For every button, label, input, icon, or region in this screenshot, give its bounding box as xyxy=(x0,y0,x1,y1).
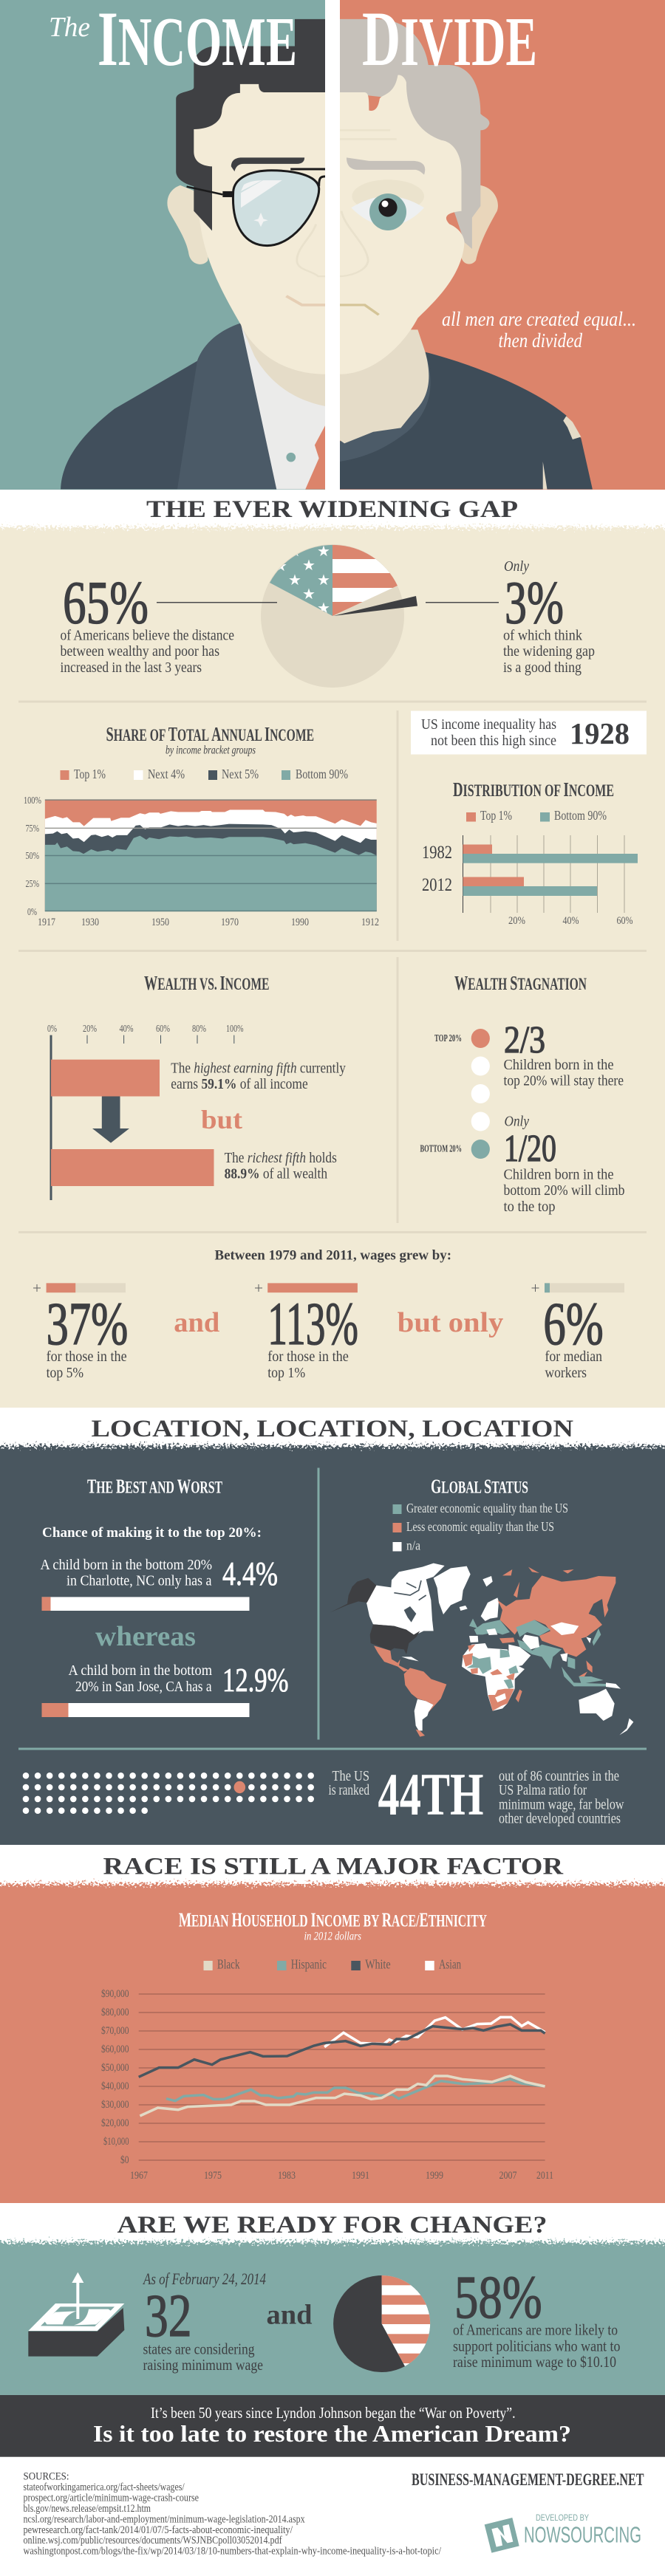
bar chart: 40% xyxy=(563,915,579,927)
pie: American flag pie chart: ★ xyxy=(288,572,301,589)
tagline: then divided xyxy=(498,329,582,352)
chart x axis labels: 1970 xyxy=(221,917,239,928)
poor man neck xyxy=(340,329,429,443)
chart subheading: in 2012 dollars xyxy=(304,1931,361,1943)
tagline xyxy=(442,308,636,352)
stat: 2/3: Children born in the xyxy=(504,1057,614,1073)
percent axis: 100% xyxy=(226,1024,244,1035)
chart y axis labels: 0% xyxy=(27,907,37,918)
stat: 3 percent xyxy=(426,558,595,676)
legend: Next 4% xyxy=(148,767,185,781)
hero illustration: the income divide xyxy=(0,0,665,490)
pie: 58 percent xyxy=(333,2275,433,2374)
chart y axis labels: 50% xyxy=(25,851,39,862)
poor man eyebrow xyxy=(347,157,425,175)
stat: 58 percent: of Americans are more likely to xyxy=(453,2321,618,2339)
banner: american dream: It’s been 50 years since Lyndon Johnson began the “War on Poverty”. xyxy=(151,2404,516,2422)
section: cream background xyxy=(0,527,665,1408)
legend: Black xyxy=(217,1957,239,1972)
stat: 1/20 xyxy=(504,1114,625,1215)
heading: Between 1979 and 2011, wages grew by: xyxy=(214,1248,451,1263)
poor man collar xyxy=(340,352,431,462)
callout: inequality since 1928: 1928 xyxy=(570,716,630,750)
poor man eyelid xyxy=(352,179,424,213)
rich man eyebrow xyxy=(231,157,304,171)
section: teal background xyxy=(0,2242,665,2395)
percent axis: 40% xyxy=(120,1024,134,1035)
legend: White xyxy=(365,1957,391,1972)
chart x axis labels: 1917 xyxy=(38,917,55,928)
ladder of dots: BOTTOM 20% xyxy=(420,1143,462,1155)
stat: 113 percent: top 1% xyxy=(267,1365,305,1381)
legend xyxy=(204,1957,461,1972)
map legend xyxy=(393,1501,568,1552)
bar chart: 1982 xyxy=(422,843,452,863)
text: but only: but only xyxy=(398,1307,503,1338)
charlotte text: in Charlotte, NC only has a xyxy=(66,1573,212,1589)
developed by: DEVELOPED BY xyxy=(536,2512,589,2523)
sources: washingtonpost.com/blogs/the-fix/wp/2014/03/18/10-numbers-that-explain-why-income-inequality-is-a-hot-topic/ xyxy=(24,2546,442,2558)
sources: bls.gov/news.release/empsit.t12.htm xyxy=(24,2503,151,2515)
y axis labels: $30,000 xyxy=(101,2099,129,2111)
stat: 1/20: 1/20 xyxy=(504,1128,556,1170)
charlotte text: A child born in the bottom 20% xyxy=(40,1557,212,1573)
text: richest fifth: 88.9% of all wealth xyxy=(225,1166,327,1182)
y axis labels: $20,000 xyxy=(101,2117,129,2129)
y axis labels: $90,000 xyxy=(101,1988,129,2000)
pie: American flag pie chart: ★ xyxy=(317,572,330,589)
sources: SOURCES: xyxy=(24,2471,69,2483)
stat: 58 percent: raise minimum wage to $10.10 xyxy=(453,2353,616,2371)
x axis labels: 1999 xyxy=(426,2170,443,2182)
stat: 2/3: top 20% will stay there xyxy=(504,1073,624,1089)
poor man forehead wrinkles xyxy=(340,130,397,139)
ranking text: minimum wage, far below xyxy=(499,1796,624,1812)
date: As of February 24, 2014 xyxy=(142,2270,266,2288)
panel: wealth vs. income xyxy=(47,972,346,1200)
bar chart: 2012 xyxy=(422,875,452,895)
panel heading: THE BEST AND WORST xyxy=(87,1476,222,1498)
legend: Next 5% xyxy=(222,767,259,781)
y axis labels: $10,000 xyxy=(103,2136,129,2148)
y axis labels: $60,000 xyxy=(101,2044,129,2055)
y axis labels: $40,000 xyxy=(101,2080,129,2092)
callout: inequality since 1928: not been this high since xyxy=(431,733,556,749)
subheading: Chance of making it to the top 20%: xyxy=(42,1525,262,1541)
stat: 65 percent: 65% xyxy=(63,569,149,637)
poor man nose xyxy=(340,211,368,276)
poor man hair xyxy=(340,19,489,249)
legend: Bottom 90% xyxy=(296,767,348,781)
rich man jacket xyxy=(61,323,280,489)
rich man neck xyxy=(241,325,325,406)
panel: wage growth xyxy=(33,1248,624,1381)
chart subheading: by income bracket groups xyxy=(166,744,256,757)
description xyxy=(143,2340,263,2374)
chart y axis labels xyxy=(24,795,41,918)
san jose text: A child born in the bottom xyxy=(68,1662,212,1679)
text: richest fifth: The richest fifth holds xyxy=(225,1150,337,1166)
chart x axis labels: 1950 xyxy=(151,917,169,928)
stat: 3 percent: Only xyxy=(504,558,529,575)
poor man mouth xyxy=(340,305,379,315)
text: highest earning fifth: earns 59.1% of all income xyxy=(171,1076,308,1092)
san jose text xyxy=(68,1661,288,1699)
san jose bar xyxy=(41,1703,250,1717)
san jose text: 20% in San Jose, CA has a xyxy=(75,1679,212,1695)
stat: 58 percent xyxy=(453,2263,621,2371)
poor man iris xyxy=(369,193,406,230)
stacked area chart xyxy=(45,800,377,911)
rich man lapel xyxy=(177,323,276,489)
heading: race: RACE IS STILL A MAJOR FACTOR xyxy=(103,1853,564,1880)
banner: american dream: Is it too late to restore the American Dream? xyxy=(93,2420,571,2447)
map legend: Greater economic equality than the US xyxy=(406,1501,568,1515)
panel heading: GLOBAL STATUS xyxy=(431,1476,528,1498)
stat: 113 percent: 113% xyxy=(267,1289,358,1357)
rich man tie xyxy=(305,425,325,489)
rich man collar pin xyxy=(286,453,296,462)
tagline: all men are created equal... xyxy=(442,308,636,330)
icon: N badge xyxy=(485,2518,519,2553)
title xyxy=(49,0,537,82)
y axis labels xyxy=(101,1988,129,2166)
poor man eye highlight xyxy=(381,201,389,207)
US dot xyxy=(233,1781,245,1793)
stat: 65 percent: of Americans believe the distance xyxy=(61,628,234,644)
y axis labels: $0 xyxy=(120,2154,129,2166)
y axis labels: $50,000 xyxy=(101,2062,129,2074)
poor man pupil xyxy=(378,198,398,217)
percent axis: 20% xyxy=(83,1024,97,1035)
icon: stack of cash with arrow xyxy=(28,2272,124,2357)
charlotte text xyxy=(40,1555,278,1592)
poor man jacket xyxy=(340,352,593,489)
stat: 65 percent xyxy=(61,569,277,676)
heading: the ever widening gap: THE EVER WIDENING GAP xyxy=(146,496,518,523)
sources: stateofworkingamerica.org/fact-sheets/wages/ xyxy=(24,2481,185,2493)
legend: Top 1% xyxy=(74,767,106,781)
x axis labels: 2011 xyxy=(536,2170,553,2182)
text: but: but xyxy=(201,1105,242,1134)
pie: American flag pie chart: ★ xyxy=(302,558,316,574)
panel: share of total annual income xyxy=(24,723,379,928)
stat: 65 percent: between wealthy and poor has xyxy=(61,643,219,660)
stat: 1/20: Children born in the xyxy=(504,1166,614,1182)
map legend: n/a xyxy=(406,1538,420,1552)
stat: 3 percent: 3% xyxy=(505,569,564,637)
legend xyxy=(466,808,607,823)
text: and: and xyxy=(266,2300,312,2331)
stat: 6 percent xyxy=(532,1283,624,1381)
title: The xyxy=(49,12,90,43)
stat: 6 percent: workers xyxy=(545,1365,587,1381)
chart heading: MEDIAN HOUSEHOLD INCOME BY RACE/ETHNICITY xyxy=(179,1909,487,1931)
panel: minimum wage states xyxy=(28,2270,266,2374)
ladder of dots: TOP 20% xyxy=(434,1033,462,1044)
sources: online.wsj.com/public/resources/documents/WSJNBCpoll03052014.pdf xyxy=(24,2535,282,2546)
aviator glasses xyxy=(187,169,325,246)
stat: 58 percent: support politicians who want to xyxy=(453,2337,621,2354)
stat: 32: 32 xyxy=(145,2281,192,2349)
chart y axis labels: 25% xyxy=(25,879,39,890)
pie: American flag pie chart: ★ xyxy=(288,544,301,560)
stat: 37 percent: for those in the xyxy=(47,1349,127,1365)
stat: 1/20: Only xyxy=(504,1114,529,1130)
heading: are we ready for change: ARE WE READY FOR CHANGE? xyxy=(117,2212,547,2238)
panel: wealth stagnation xyxy=(420,972,625,1215)
section: navy background xyxy=(0,1446,665,1845)
stat: 1/20: to the top xyxy=(504,1199,556,1215)
text: and: and xyxy=(174,1307,219,1338)
percent axis: 80% xyxy=(192,1024,206,1035)
banner: american dream xyxy=(0,2395,665,2457)
poor man ear xyxy=(462,185,498,264)
stat: 2/3 xyxy=(504,1019,624,1089)
bar chart xyxy=(422,835,638,927)
stat: 37 percent xyxy=(33,1283,128,1381)
bar chart: 60% xyxy=(616,915,632,927)
x axis labels: 2007 xyxy=(499,2170,517,2182)
legend xyxy=(61,767,348,781)
ranking text xyxy=(328,1761,624,1828)
chart heading: DISTRIBUTION OF INCOME xyxy=(453,778,614,801)
legend: Top 1% xyxy=(480,808,512,823)
stat: 37 percent: 37% xyxy=(47,1289,128,1357)
ranking text: other developed countries xyxy=(499,1811,621,1827)
chart heading: SHARE OF TOTAL ANNUAL INCOME xyxy=(106,723,314,745)
stat: 3 percent: of which think xyxy=(503,628,582,644)
stat: 113 percent xyxy=(255,1283,358,1381)
y axis labels: $80,000 xyxy=(101,2007,129,2018)
map legend: Less economic equality than the US xyxy=(406,1519,554,1534)
rich man shirt xyxy=(241,323,325,489)
stat: 113 percent: for those in the xyxy=(267,1349,349,1365)
pie: American flag pie chart: ★ xyxy=(302,586,316,603)
sources xyxy=(24,2471,442,2558)
x axis labels xyxy=(130,2170,553,2182)
chart y axis labels: 75% xyxy=(25,823,39,835)
chart x axis labels xyxy=(38,917,379,928)
jacket tear xyxy=(563,416,581,439)
rich man mouth xyxy=(286,296,325,305)
stat: 65 percent: increased in the last 3 years xyxy=(61,660,202,676)
ladder of dots xyxy=(420,1029,490,1159)
panel: 44th ranking xyxy=(26,1761,624,1828)
ranking text: The US xyxy=(332,1768,369,1784)
bar: wealth xyxy=(51,1149,214,1186)
chart y axis labels: 100% xyxy=(24,795,41,806)
ranking text: 44TH xyxy=(378,1761,483,1828)
stat: 3 percent: is a good thing xyxy=(503,660,582,676)
panel heading: WEALTH VS. INCOME xyxy=(144,972,269,994)
text: whereas: whereas xyxy=(95,1621,196,1652)
y axis labels: $70,000 xyxy=(101,2025,129,2037)
charlotte bar xyxy=(41,1597,250,1611)
panel: median household income xyxy=(101,1909,553,2182)
stat: 2/3: 2/3 xyxy=(504,1019,545,1061)
bar: income xyxy=(51,1060,160,1096)
pie: American flag pie chart: ★ xyxy=(317,544,330,560)
pie: American flag pie chart: ★ xyxy=(317,600,330,617)
stat: 6 percent: 6% xyxy=(543,1289,604,1357)
bar chart: 20% xyxy=(508,915,525,927)
text: highest earning fifth: The highest earning fifth currently xyxy=(171,1061,346,1077)
sources: ncsl.org/research/labor-and-employment/minimum-wage-legislation-2014.aspx xyxy=(24,2514,305,2526)
section: coral background xyxy=(0,1884,665,2203)
ranking text: out of 86 countries in the xyxy=(499,1768,619,1784)
stat: 6 percent: for median xyxy=(545,1349,602,1365)
arrow: down xyxy=(92,1096,129,1143)
poor man face xyxy=(340,75,465,374)
dot grid of 86 countries xyxy=(26,1775,311,1811)
logo: nowsourcing xyxy=(485,2512,641,2553)
san jose text: 12.9% xyxy=(222,1661,288,1699)
description: states are considering xyxy=(143,2340,255,2358)
callout: inequality since 1928: US income inequality has xyxy=(421,716,556,733)
centre divider xyxy=(325,0,340,490)
ranking text: US Palma ratio for xyxy=(499,1782,587,1798)
chart x axis labels: 1990 xyxy=(291,917,309,928)
percent axis: 60% xyxy=(156,1024,170,1035)
rich man hair xyxy=(176,19,325,230)
chart x axis labels: 1930 xyxy=(81,917,99,928)
pie: American flag pie chart: ★ xyxy=(274,558,287,575)
rich man face xyxy=(194,84,325,374)
percent axis: 0% xyxy=(47,1024,57,1035)
legend: Hispanic xyxy=(291,1957,327,1972)
poor man eye white xyxy=(351,196,424,226)
world map xyxy=(330,1563,633,1737)
ranking text: is ranked xyxy=(328,1782,369,1798)
callout: inequality since 1928 xyxy=(411,710,647,755)
heading: location: LOCATION, LOCATION, LOCATION xyxy=(92,1416,573,1442)
stat: 58 percent: 58% xyxy=(454,2263,542,2331)
text: highest earning fifth xyxy=(171,1061,346,1092)
sources: prospect.org/article/minimum-wage-crash-course xyxy=(24,2493,199,2504)
charlotte text: 4.4% xyxy=(222,1555,278,1592)
legend: Asian xyxy=(439,1957,461,1972)
rich man ear xyxy=(167,185,212,264)
x axis labels: 1975 xyxy=(204,2170,222,2182)
sources: pewresearch.org/fact-tank/2014/01/07/5-facts-about-economic-inequality/ xyxy=(24,2524,293,2536)
text: richest fifth xyxy=(225,1150,337,1182)
panel: distribution of income xyxy=(422,778,638,927)
stat: 3 percent: the widening gap xyxy=(503,643,595,660)
chart x axis labels: 1912 xyxy=(361,917,379,928)
x axis labels: 1991 xyxy=(352,2170,369,2182)
panel: the best and worst xyxy=(40,1476,288,1717)
panel heading: WEALTH STAGNATION xyxy=(454,972,587,994)
x axis labels: 1967 xyxy=(130,2170,148,2182)
description: raising minimum wage xyxy=(143,2356,263,2374)
rich man nose xyxy=(297,225,325,276)
percent axis xyxy=(47,1024,244,1200)
panel: global status xyxy=(330,1476,633,1737)
x axis labels: 1983 xyxy=(278,2170,296,2182)
line chart xyxy=(139,1994,545,2160)
legend: Bottom 90% xyxy=(554,808,607,823)
stat: 37 percent: top 5% xyxy=(47,1365,83,1381)
pie: American flag pie chart xyxy=(251,539,417,688)
stat: 1/20: bottom 20% will climb xyxy=(504,1182,625,1199)
